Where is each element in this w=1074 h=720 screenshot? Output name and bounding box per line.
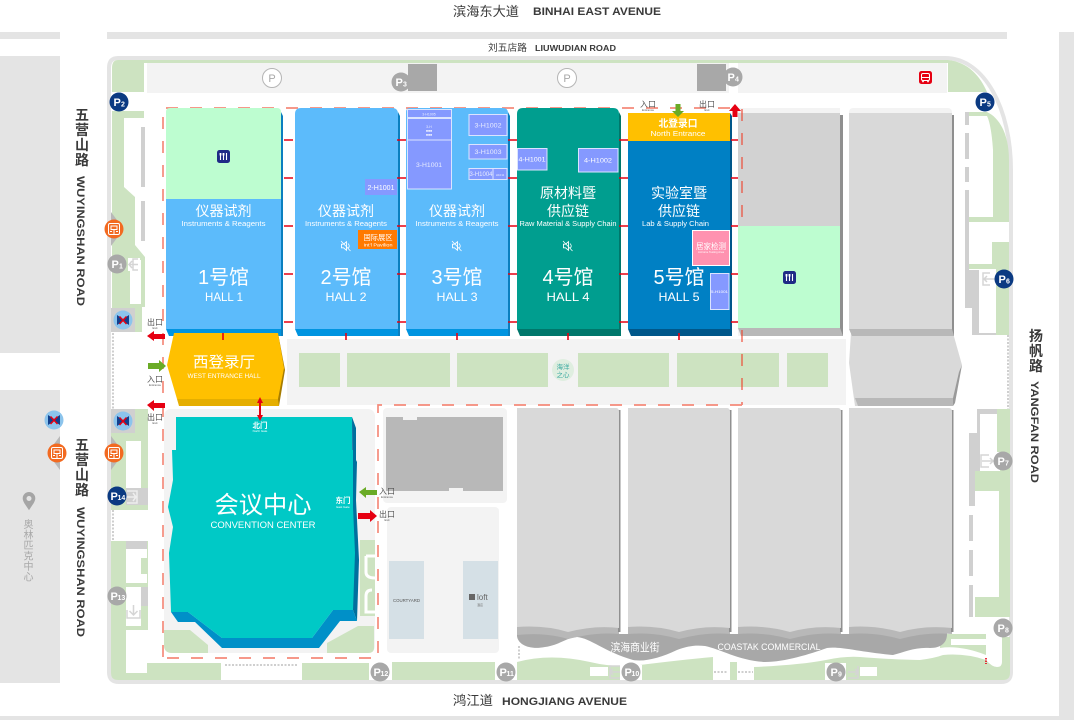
parking marker P9 [826, 662, 846, 682]
parking marker P6: P [998, 274, 1006, 286]
icon: speaker [563, 241, 572, 251]
booth 4-H1001: 4-H1001 [518, 156, 546, 164]
parking marker P11: 11 [506, 671, 514, 678]
north entrance [628, 113, 730, 141]
Hall 5: 实验室暨 [651, 185, 707, 201]
convention center grounds [164, 409, 375, 653]
Hall 3: Instruments & Reagents [416, 221, 499, 228]
parking marker P7 [994, 452, 1012, 470]
road label: Wuyingshan Road upper: WUYINGSHAN ROAD [74, 176, 86, 306]
entry and exit labels [147, 99, 715, 522]
label: west exit lower: Exit [152, 421, 158, 425]
Loft hotel [463, 561, 498, 639]
parking marker P2: 2 [121, 102, 125, 108]
Hall 1 [166, 108, 283, 336]
Hall 3: ■■■ [426, 133, 432, 137]
grey building south of plaza [383, 408, 507, 503]
parking plain markers [262, 68, 576, 88]
road label: Liuwudian Road [488, 42, 616, 54]
landmark: Olympic Center: 奥 [24, 518, 34, 531]
label: north entrance: Entrance [642, 108, 654, 112]
parking marker P5: P [980, 97, 987, 109]
arrow: west exit lower [147, 400, 165, 411]
road label: Hongjiang Avenue [453, 693, 627, 708]
road label: Wuyingshan Road upper [74, 107, 89, 306]
west entrance hall: WEST ENTRANCE HALL [188, 374, 261, 380]
road label: Liuwudian Road: 刘五店路 [488, 42, 527, 54]
Courtyard hotel: COURTYARD [393, 598, 421, 603]
arrow: north exit [729, 104, 741, 117]
north gate [252, 420, 268, 433]
parking marker P9: P [830, 667, 838, 679]
grey hall 6 with restaurant zone [738, 108, 843, 336]
Hall 3: 仪器试剂 [429, 203, 485, 219]
arrow: west exit upper [147, 331, 165, 341]
parking marker P6: 6 [1006, 278, 1010, 286]
icon: speaker [341, 241, 350, 251]
road label: Liuwudian Road: LIUWUDIAN ROAD [535, 44, 616, 53]
label: east entrance: Entrance [381, 495, 393, 499]
Hall 5: 供应链 [658, 203, 700, 219]
road label: Hongjiang Avenue: HONGJIANG AVENUE [502, 696, 627, 708]
booth 5-H1001 [710, 274, 729, 310]
home testing zone: 居家检测 [696, 241, 726, 251]
grey hall 7 [849, 108, 954, 336]
exhibition boundary dashed line: top and left [163, 108, 742, 657]
landmark: Olympic Center: 匹 [24, 541, 34, 552]
north gate: North Gate [253, 429, 268, 433]
parking marker P10: 10 [632, 671, 639, 678]
parking marker P13: 13 [118, 595, 125, 602]
label: north exit: Exit [704, 108, 710, 112]
Hall 1: HALL 1 [205, 290, 243, 304]
parking marker P8: P [998, 623, 1005, 635]
parking marker P5: 5 [987, 102, 991, 108]
road label: Wuyingshan Road upper: 路 [75, 152, 89, 168]
parking marker P11: P [500, 667, 507, 679]
north entrance: North Entrance [650, 131, 706, 138]
Loft hotel: loft [477, 593, 488, 602]
Hall 2: 仪器试剂 [318, 203, 374, 219]
ocean heart [552, 359, 574, 381]
road label: Hongjiang Avenue: 鸿江道 [453, 693, 493, 708]
icon: restaurant [217, 150, 230, 163]
Hall 3: 3-H1001 [416, 162, 442, 169]
dotted kerbs [113, 333, 1008, 672]
parking marker P4: 4 [735, 76, 739, 84]
parking marker P13: P [110, 591, 118, 603]
arrow: convention east entrance [359, 487, 377, 498]
booths hall 3 [408, 110, 507, 189]
hotels plot [387, 507, 499, 653]
home testing zone: At-home Testing Area [698, 251, 725, 254]
Hall 2: HALL 2 [326, 290, 367, 304]
parking marker P1: P [112, 259, 119, 271]
central plaza [287, 339, 846, 405]
road label: Wuyingshan Road upper: 五 [75, 107, 89, 123]
Hall 5: Lab & Supply Chain [642, 221, 709, 228]
parking marker P8: 8 [1005, 628, 1009, 634]
Hall 2: Instruments & Reagents [305, 221, 388, 228]
road label: Binhai East Avenue [453, 4, 661, 19]
icon: bus [919, 71, 932, 84]
Hall 4: HALL 4 [546, 290, 590, 304]
icon: speaker [452, 241, 462, 251]
road label: Binhai East Avenue: 滨海东大道 [453, 4, 519, 19]
Hall 2: 2号馆 [320, 266, 372, 289]
landmark: Olympic Center: 林 [24, 528, 34, 542]
road label: Yangfan Road [1028, 328, 1043, 483]
Hall 3: 3-H [426, 125, 432, 129]
grey halls south row [517, 408, 954, 639]
label: Binhai commercial street: 滨海商业街 [610, 640, 660, 654]
site boundary [109, 58, 1011, 682]
parking marker P11 [496, 662, 516, 682]
road label: Wuyingshan Road lower: 山 [75, 467, 89, 483]
parking marker P10 [622, 662, 640, 682]
parking marker P5 [976, 92, 994, 112]
label: west exit upper: Exit [152, 326, 158, 330]
road label: Wuyingshan Road lower: WUYINGSHAN ROAD [74, 507, 86, 637]
label: west entrance: Entrance [149, 383, 161, 387]
metro stop lower left [48, 436, 66, 470]
grey kerbs [111, 112, 997, 617]
red connector ticks [223, 140, 986, 664]
booth 2-H1001: 2-H1001 [368, 185, 395, 192]
Hall 3: H1011 [496, 173, 505, 177]
label: east exit: 出口 [379, 509, 395, 519]
top parking strip [147, 63, 947, 93]
label: west exit lower: 出口 [147, 412, 163, 422]
metro stop upper [104, 212, 124, 246]
Hall 3: ■■■ [426, 129, 432, 133]
east gate: 东门 [336, 495, 350, 505]
ocean heart: 之心 [556, 370, 570, 379]
booth 5-H1001: 5-H1001 [711, 289, 729, 294]
Hall 3: HALL 3 [436, 290, 478, 304]
Courtyard hotel [389, 561, 424, 639]
road label: Binhai East Avenue: BINHAI EAST AVENUE [533, 6, 661, 18]
Hall 5 [628, 113, 732, 336]
parking marker P6 [994, 270, 1014, 288]
label: west exit lower [147, 412, 163, 425]
booth 4-H1002: 4-H1002 [584, 158, 612, 164]
green landscaping [111, 60, 1010, 680]
coastal commercial street [517, 628, 947, 662]
parking marker P4 [724, 68, 742, 86]
road label: Yangfan Road: 路 [1029, 358, 1043, 374]
label: Coastak Commercial: COASTAK COMMERCIAL [718, 642, 820, 652]
icon: restaurant [783, 271, 796, 284]
label: west entrance: 入口 [147, 375, 163, 384]
road label: Yangfan Road: 扬 [1029, 328, 1043, 344]
east gate: East Gate [336, 505, 350, 509]
booth 4-H1001 [518, 148, 547, 170]
arrow: convention north link [257, 397, 263, 421]
label: east exit: Exit [384, 518, 390, 522]
parking plain markers: P [268, 73, 276, 85]
label: east exit [379, 509, 395, 522]
booth 2-H1001 [365, 179, 397, 195]
Hall 4: 供应链 [547, 203, 589, 219]
Hall 4: 原材料暨 [540, 185, 596, 201]
road label: Wuyingshan Road lower: 路 [75, 482, 89, 498]
label: east entrance: 入口 [379, 487, 395, 496]
parking marker P2: P [114, 97, 121, 109]
west entrance hall: 西登录厅 [193, 354, 255, 371]
road label: Yangfan Road: 帆 [1029, 343, 1043, 359]
convention center: 会议中心 [214, 492, 312, 519]
label: north exit [699, 99, 715, 112]
road label: Yangfan Road: YANGFAN ROAD [1028, 381, 1040, 483]
parking marker P12 [370, 662, 390, 682]
parking marker P2 [110, 92, 128, 112]
landmark: Olympic Center: 中 [24, 560, 34, 573]
exhibition boundary dashed line: right and south [163, 330, 742, 658]
Hall 3 [406, 108, 510, 336]
arrow: north entrance [672, 104, 684, 117]
parking marker P14 [108, 486, 126, 506]
road label: Wuyingshan Road upper: 营 [75, 122, 89, 138]
parking marker P10: P [624, 667, 632, 679]
International pavilion: 国际展区 [364, 233, 393, 242]
parking marker P3 [392, 72, 410, 92]
landmark: Olympic Center: 心 [24, 572, 34, 584]
Hall 5: HALL 5 [658, 290, 700, 304]
convention center [168, 417, 359, 648]
Loft hotel: 酒店 [477, 602, 483, 607]
parking marker P4: P [728, 72, 735, 84]
icon: subway lower left [114, 412, 132, 430]
ocean heart: 海洋 [556, 362, 570, 371]
parking marker P12: P [374, 667, 381, 679]
parking marker P1 [108, 254, 126, 274]
north gate: 北门 [252, 420, 268, 430]
label: north exit: 出口 [699, 99, 715, 109]
Hall 2 [295, 108, 400, 336]
parking marker P8 [994, 618, 1012, 638]
road label: Wuyingshan Road upper: 山 [75, 137, 89, 153]
parking direction arrows [126, 259, 996, 678]
Hall 3: 3-H1003 [474, 149, 502, 156]
parking marker P3: 3 [403, 82, 407, 88]
icon: subway upper left [114, 310, 132, 330]
Hall 3: 3-H1004 [470, 172, 493, 178]
Hall 1: Instruments & Reagents [182, 221, 266, 228]
white roads cut into green [126, 116, 1009, 680]
parking plain markers: P [563, 73, 571, 85]
metro stop lower right [104, 436, 124, 470]
Hall 4 [517, 108, 621, 336]
International pavilion: Int'l Pavilion [364, 242, 393, 248]
home testing zone [692, 230, 730, 266]
Hall 4: Raw Material & Supply Chain [520, 221, 617, 228]
landmark: Olympic Center: 克 [24, 550, 34, 562]
parking marker P1: 1 [119, 264, 123, 270]
arrow: convention east exit [358, 510, 377, 522]
road label: Wuyingshan Road lower [74, 437, 89, 637]
Hall 1: 仪器试剂 [196, 203, 252, 219]
east grey building [849, 333, 962, 406]
label: north entrance: 入口 [640, 100, 656, 109]
label: west exit upper: 出口 [147, 317, 163, 327]
Hall 3: 3号馆 [432, 266, 482, 289]
convention center: CONVENTION CENTER [210, 520, 316, 530]
Hall 1: 1号馆 [198, 266, 249, 289]
parking marker P13 [108, 586, 126, 606]
icon: subway far left [44, 410, 64, 430]
road label: Wuyingshan Road lower: 五 [75, 437, 89, 453]
parking marker P14: P [110, 491, 118, 503]
Hall 3: 3-H1005 [422, 112, 436, 116]
west entrance hall [167, 333, 285, 406]
Hall 3: 3-H1002 [474, 122, 502, 130]
label: west exit upper [147, 317, 163, 330]
International pavilion [358, 230, 397, 249]
parking marker P14: 14 [118, 495, 125, 502]
north entrance: 北登录口 [658, 117, 698, 130]
booth 4-H1002 [578, 148, 618, 172]
parking marker P12: 12 [380, 671, 388, 678]
Hall 4: 4号馆 [542, 266, 594, 289]
landmark: Olympic Center [23, 492, 35, 584]
east gate [336, 495, 350, 509]
parking marker P7: P [998, 456, 1005, 468]
parking marker P7: 7 [1005, 460, 1009, 468]
road label: Wuyingshan Road lower: 营 [75, 452, 89, 468]
arrow: west entrance [148, 360, 166, 372]
parking marker P9: 9 [838, 672, 842, 678]
parking marker P3: P [396, 77, 403, 89]
Hall 5: 5号馆 [654, 266, 704, 289]
